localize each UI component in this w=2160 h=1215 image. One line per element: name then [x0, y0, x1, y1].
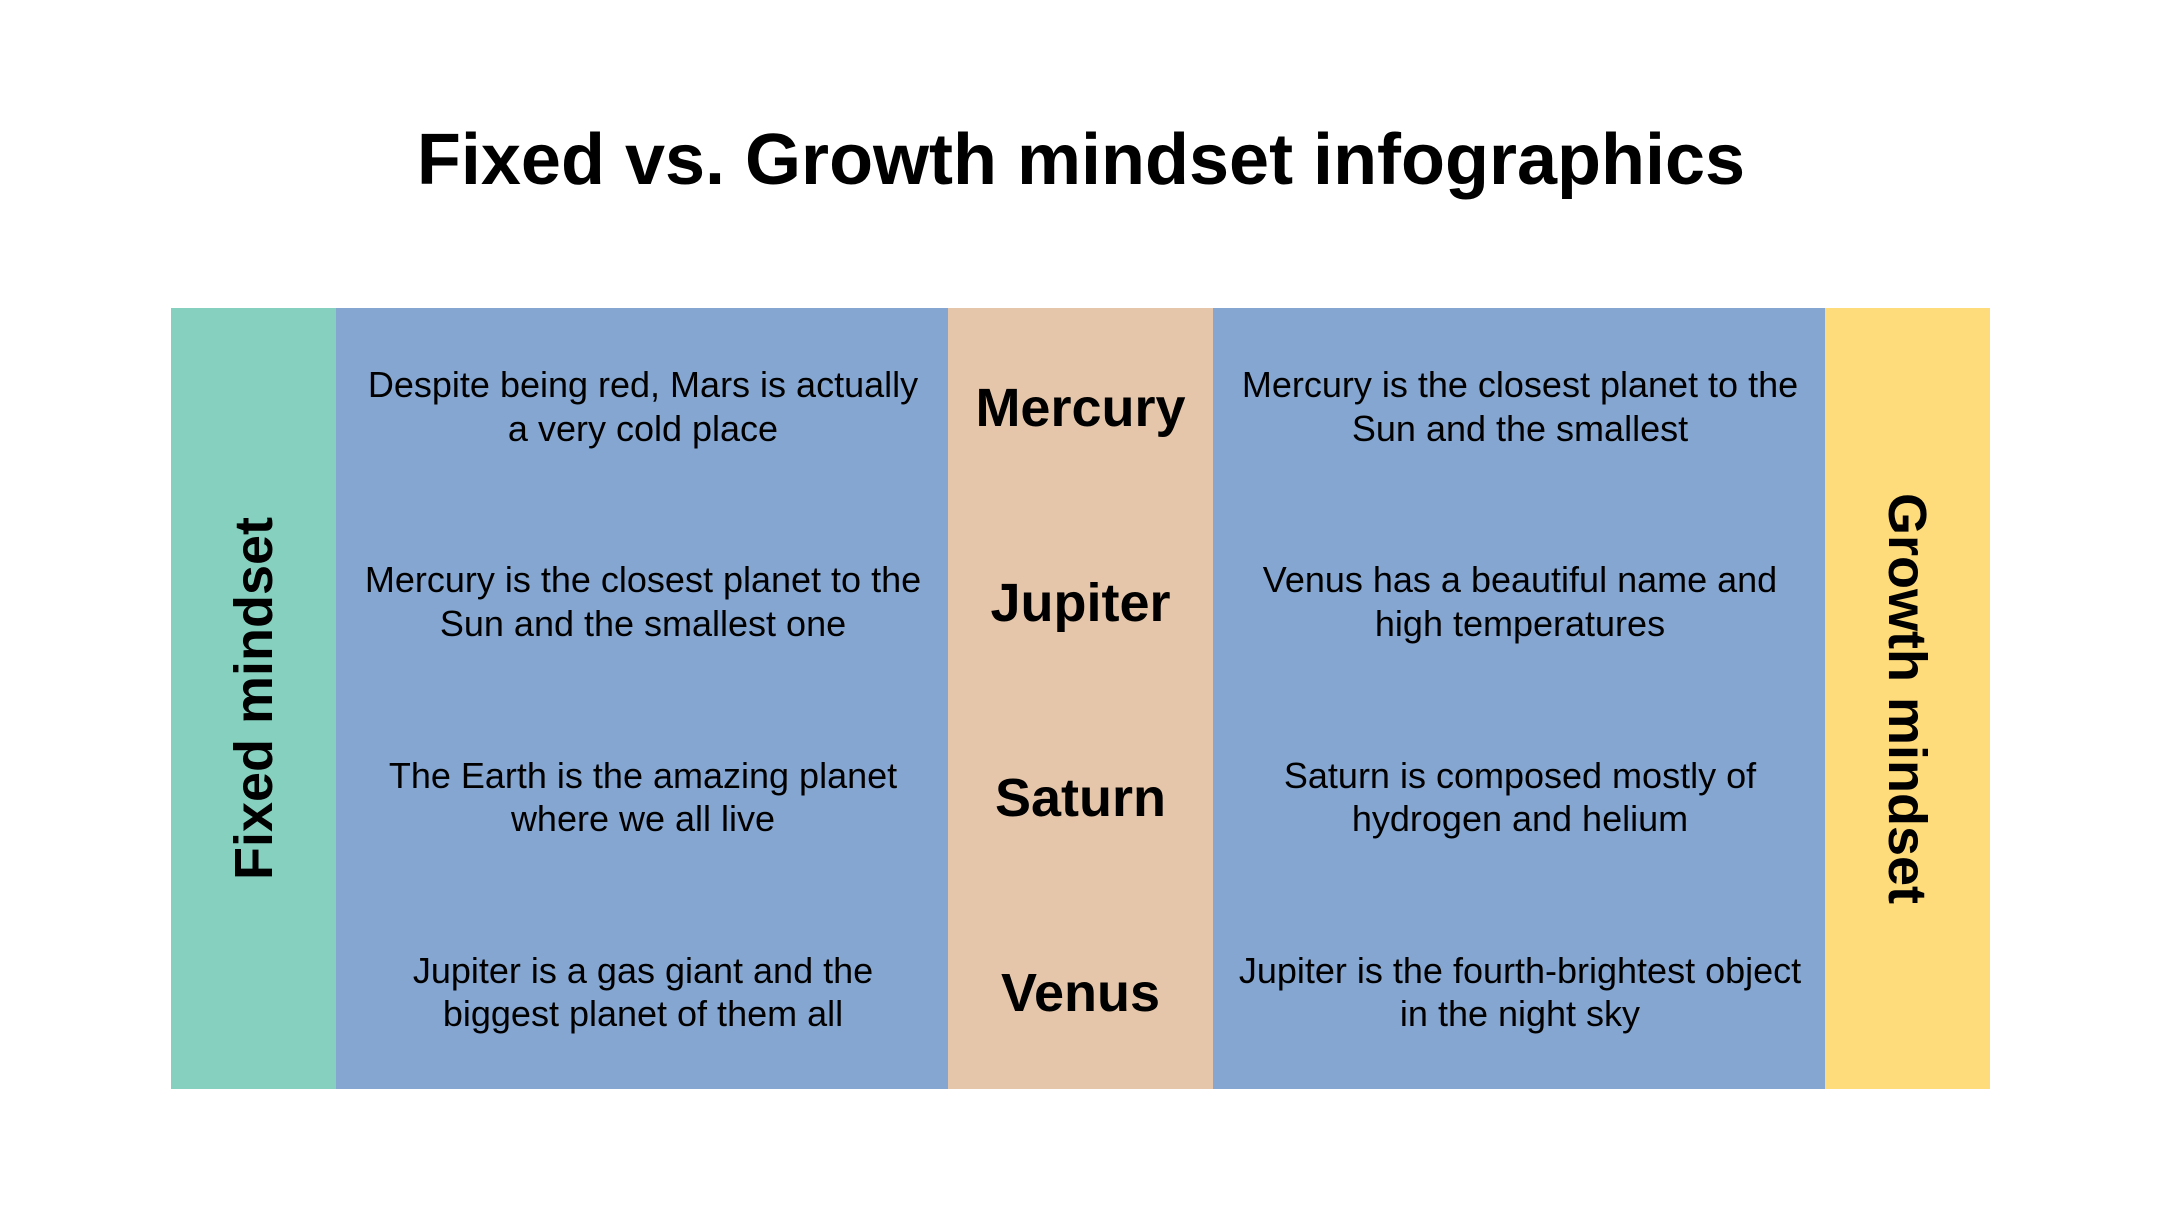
panel: growth mindset descriptions	[1213, 308, 1825, 1089]
text: growth Venus row: in the night sky	[1400, 993, 1640, 1034]
text: fixed Saturn row: where we all live	[511, 798, 775, 839]
text: growth Jupiter row: Venus has a beautiful name and	[1263, 559, 1777, 600]
text: fixed Saturn row	[389, 755, 897, 839]
text: fixed Venus row: biggest planet of them all	[443, 993, 843, 1034]
text: growth Mercury row: Mercury is the closest planet to the	[1242, 364, 1798, 405]
text: fixed Jupiter row: Sun and the smallest one	[440, 602, 846, 644]
text: growth Venus row: Jupiter is the fourth-brightest object	[1239, 950, 1801, 991]
panel: planet names column	[948, 308, 1213, 1089]
text: growth Venus row	[1239, 950, 1801, 1034]
text: fixed Mercury row	[368, 364, 918, 448]
panel: fixed mindset descriptions	[336, 308, 948, 1089]
panel: growth mindset column	[1825, 308, 1990, 1089]
heading: fixed mindset: Fixed mindset	[224, 517, 284, 880]
text: growth Jupiter row: high temperatures	[1375, 602, 1665, 644]
text: growth Mercury row	[1242, 364, 1798, 448]
panel: fixed mindset column	[171, 308, 336, 1089]
text: fixed Jupiter row: Mercury is the closest planet to the	[365, 559, 921, 600]
text: growth Saturn row	[1284, 755, 1756, 839]
label: Mercury: Mercury	[975, 378, 1186, 438]
text: fixed Jupiter row	[365, 559, 921, 644]
text: fixed Saturn row: The Earth is the amazing planet	[389, 755, 897, 796]
heading: growth mindset: Growth mindset	[1877, 493, 1937, 904]
text: growth Saturn row: hydrogen and helium	[1352, 798, 1688, 839]
title: Fixed vs. Growth mindset infographics	[417, 120, 1745, 200]
text: fixed Venus row	[413, 950, 873, 1034]
text: growth Mercury row: Sun and the smallest	[1352, 408, 1688, 448]
text: fixed Mercury row: a very cold place	[508, 408, 778, 448]
label: Saturn: Saturn	[995, 768, 1166, 828]
text: fixed Venus row: Jupiter is a gas giant and the	[413, 950, 873, 991]
text: growth Jupiter row	[1262, 559, 1777, 644]
text: fixed Mercury row: Despite being red, Mars is actually	[368, 364, 918, 405]
text: growth Saturn row: Saturn is composed mostly of	[1284, 755, 1756, 796]
label: Venus: Venus	[1001, 963, 1160, 1023]
label: Jupiter: Jupiter	[990, 573, 1171, 633]
